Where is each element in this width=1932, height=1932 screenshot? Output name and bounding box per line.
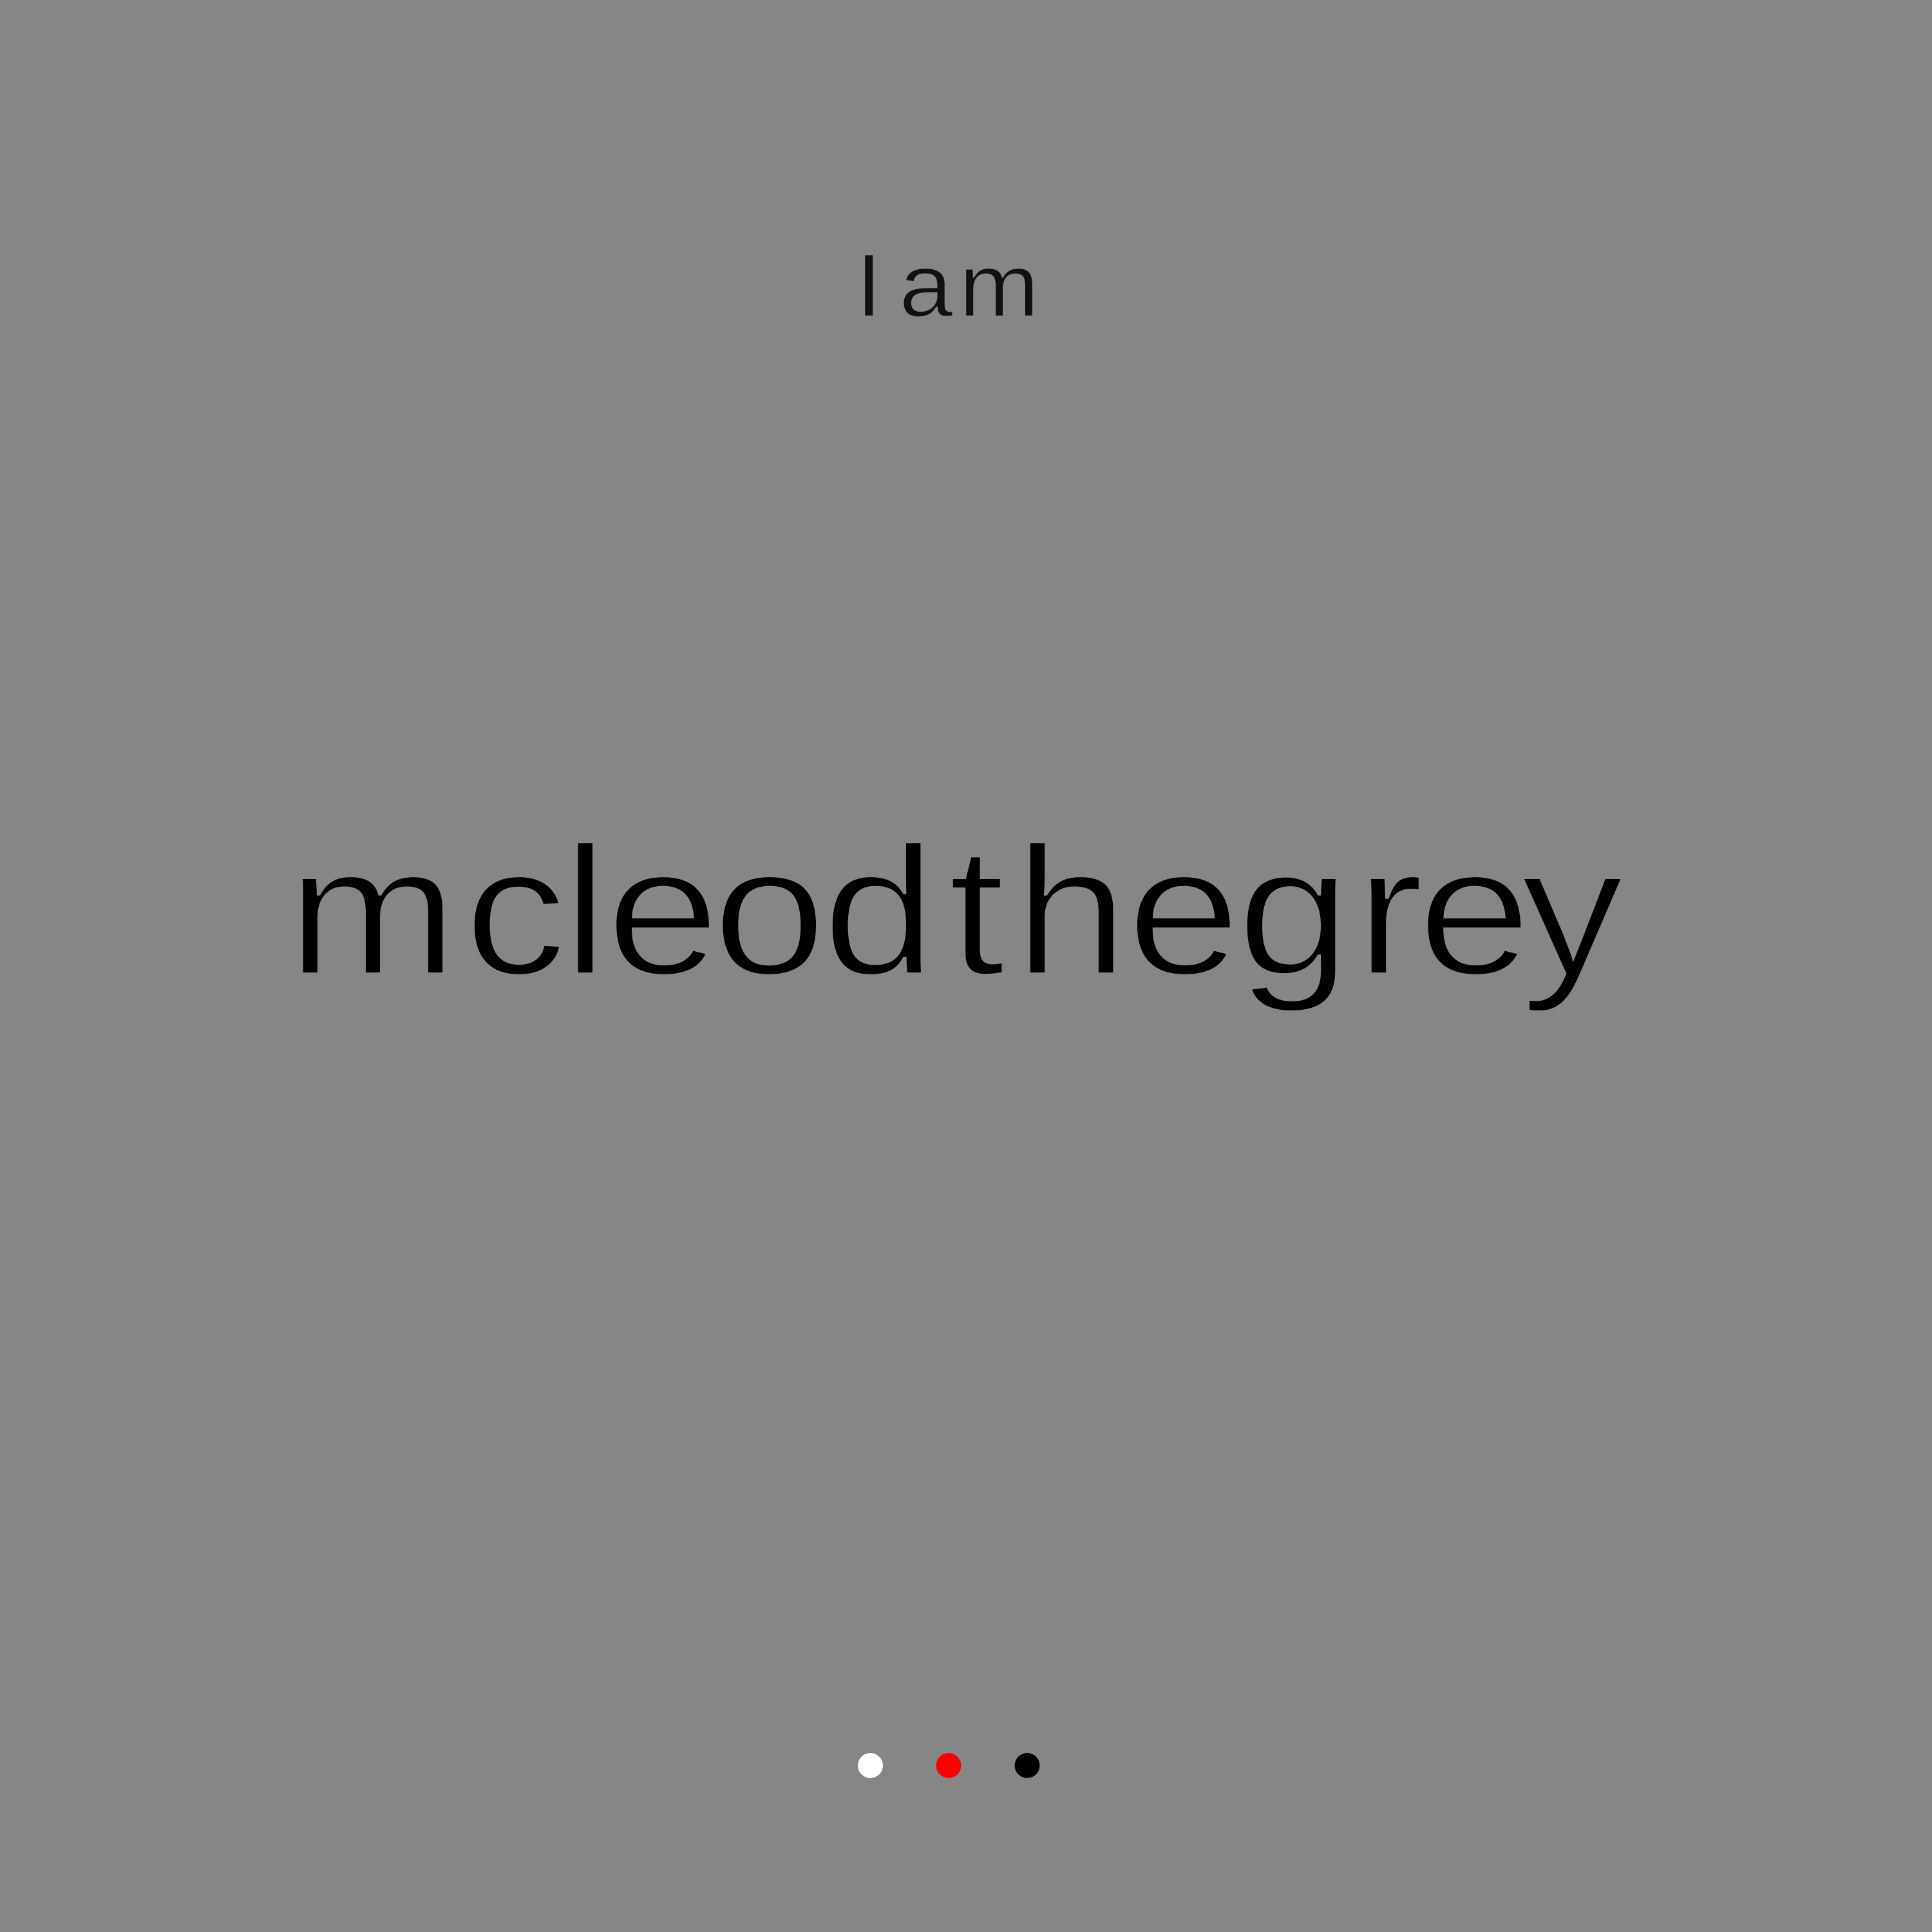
pagination dots: [858, 1753, 1039, 1778]
icon: white dot: [858, 1753, 883, 1778]
title: mcleodthegrey: mcleodthegrey: [287, 808, 1624, 1014]
icon: black dot: [1015, 1753, 1039, 1778]
heading: I am: I am: [855, 235, 1039, 336]
icon: red dot: [936, 1753, 961, 1778]
